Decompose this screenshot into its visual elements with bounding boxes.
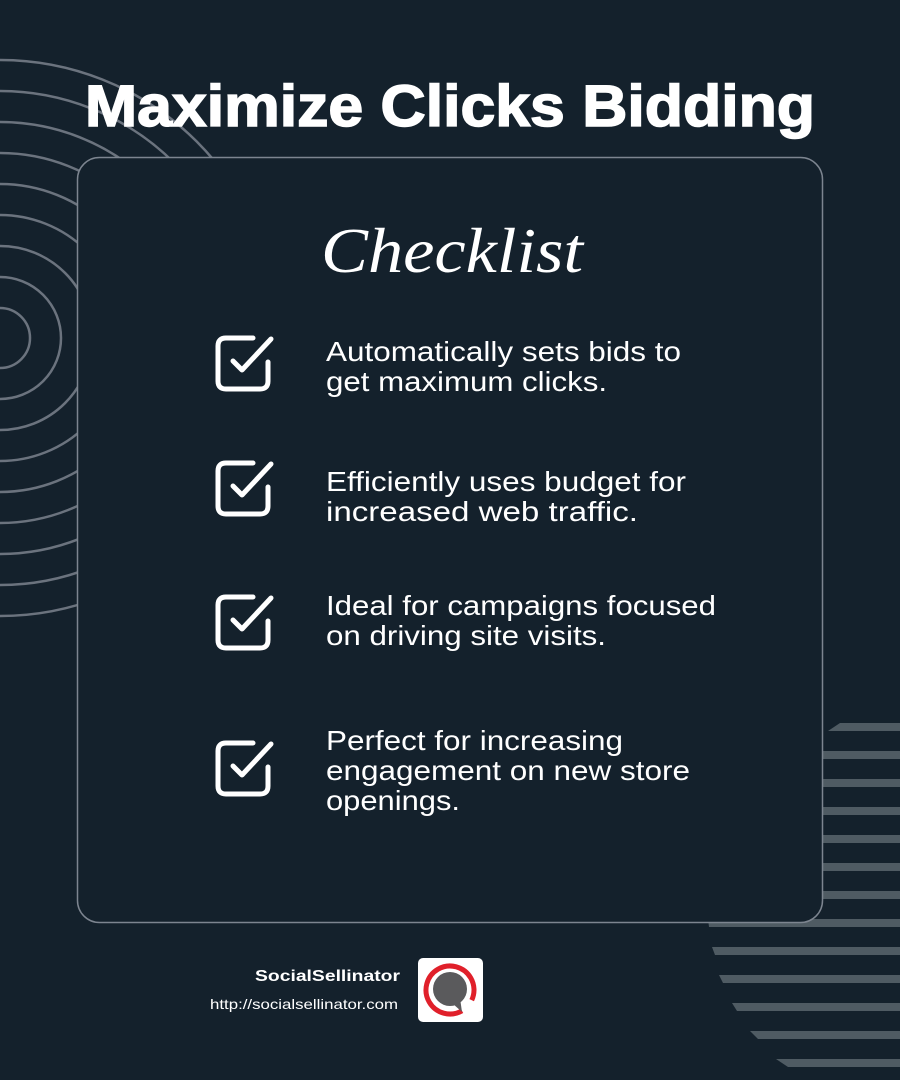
heading: Checklist: Checklist xyxy=(321,215,585,286)
item 1 xyxy=(218,336,681,397)
item 3 xyxy=(218,590,716,651)
text 4: engagement on new store xyxy=(326,755,690,786)
item 2 xyxy=(218,463,686,527)
decorative stripes xyxy=(708,723,900,1067)
text 2: increased web traffic. xyxy=(326,496,638,527)
footer brand text xyxy=(210,968,400,1012)
title: Maximize Clicks Bidding xyxy=(85,74,815,139)
icon: checkbox 2 xyxy=(218,463,271,514)
footer brand text: SocialSellinator xyxy=(255,968,400,985)
panel: checklist card xyxy=(78,158,822,922)
text 2: Efficiently uses budget for xyxy=(326,466,686,497)
icon: checkbox 1 xyxy=(218,338,271,389)
text 4: Perfect for increasing xyxy=(326,725,623,756)
item 4 xyxy=(218,725,690,816)
text 3: on driving site visits. xyxy=(326,620,606,651)
footer brand text: http://socialsellinator.com xyxy=(210,996,398,1012)
text 3: Ideal for campaigns focused xyxy=(326,590,716,621)
icon: checkbox 3 xyxy=(218,597,271,648)
icon: logo xyxy=(417,957,483,1023)
text 1: get maximum clicks. xyxy=(326,366,607,397)
icon: checkbox 4 xyxy=(218,743,271,794)
decorative concentric arcs xyxy=(0,60,278,616)
text 4: openings. xyxy=(326,785,460,816)
text 1: Automatically sets bids to xyxy=(326,336,681,367)
